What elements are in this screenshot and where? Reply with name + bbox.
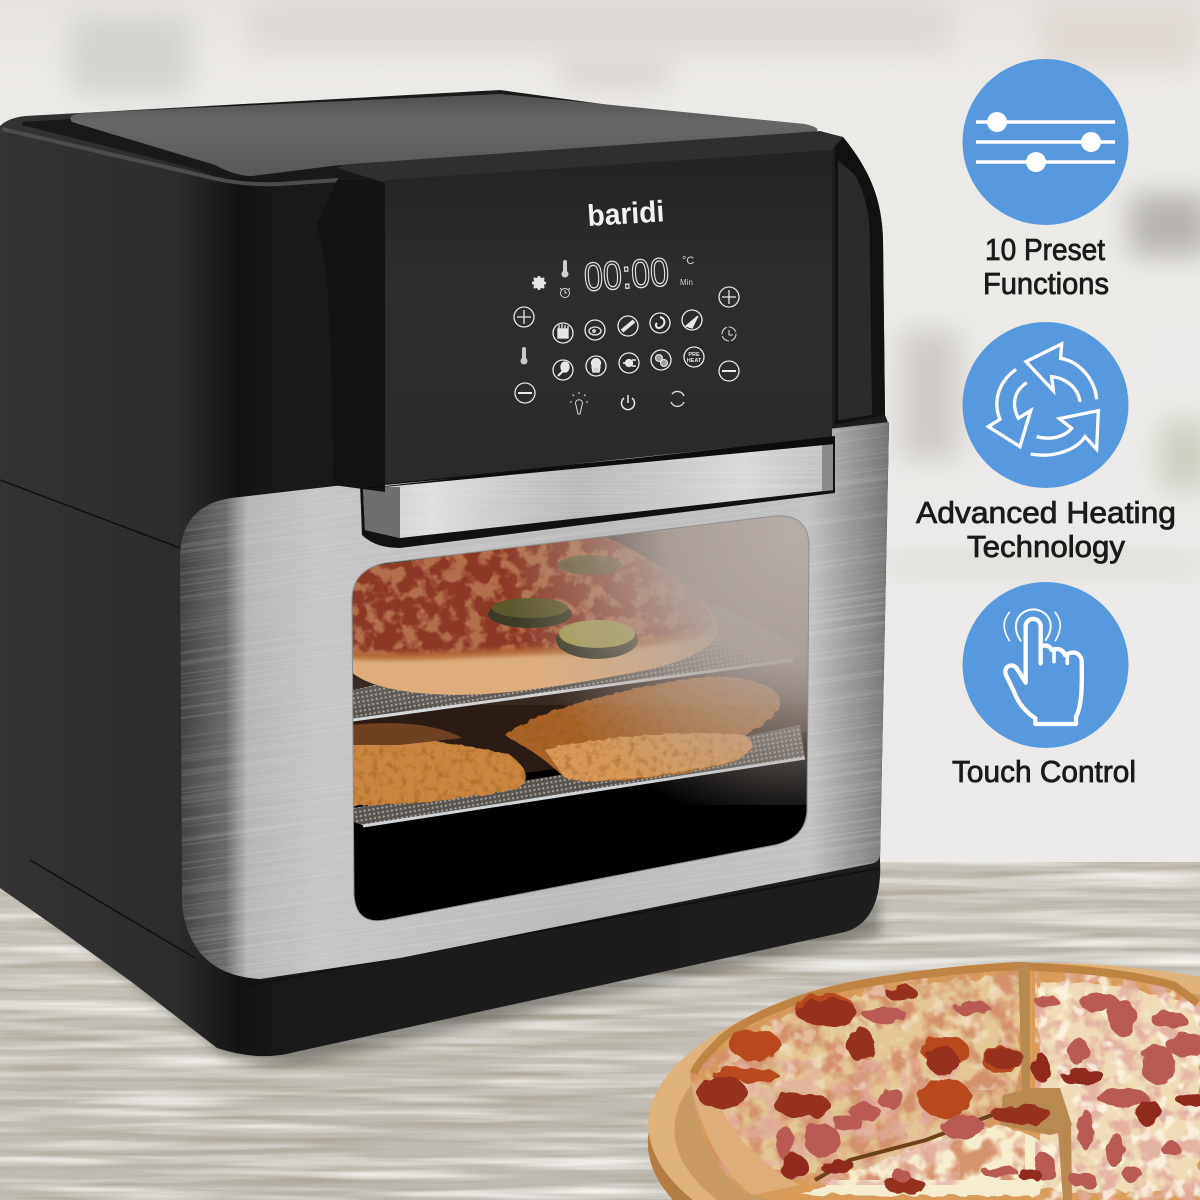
icon: light bulb [570,392,588,414]
top rim highlight [2,129,338,184]
label: Advanced Heating [916,495,1176,530]
button: temperature plus [514,307,534,327]
pizza [680,955,1200,1200]
stainless steel front panel [180,422,889,979]
feature: 10 preset functions [962,59,1128,301]
left breaded chicken [352,735,526,806]
icon: sliders [962,59,1128,225]
control panel [358,150,835,489]
upper rack [353,605,803,720]
degree label: °C [682,255,694,267]
wooden countertop [0,862,1200,1200]
lid tray [70,94,817,176]
brand name: baridi [586,195,665,233]
icon: rotate [671,391,684,406]
upper rack front edge [353,660,793,720]
icon: small thermometer [562,260,568,278]
preset buttons row one [553,310,702,343]
fryer body [0,90,889,1056]
cheese layer [712,975,1200,1195]
lower rack [353,725,805,826]
preheat label: HEAT [687,358,702,364]
feature: advanced heating technology [916,322,1176,564]
door handle [360,440,840,548]
wooden pizza board [648,963,1200,1200]
icon: circulating arrows [962,322,1128,488]
control panel side strip [316,180,385,492]
label: Technology [967,529,1125,564]
sauce patches [711,994,1018,1118]
icon: thermometer [520,347,528,364]
pizza in oven [345,530,725,695]
feature: touch control [952,582,1136,789]
right breaded chicken [505,677,780,781]
button: time minus [719,361,739,381]
icon: timer clock [722,327,736,341]
preheat label [687,352,702,364]
label: 10 Preset [985,232,1105,267]
time display: 00:00 [583,250,670,300]
label [916,495,1176,564]
lower rack front edge [363,758,805,826]
crust rim [690,962,1200,1072]
fryer shadow on counter [60,900,880,1064]
icon: fan [532,276,546,290]
slice gaps [1000,958,1072,1200]
label: Touch Control [952,754,1136,789]
preset buttons row two [553,347,704,380]
button: temperature minus [515,383,535,403]
blurred kitchen background [0,0,1200,880]
body top face [22,92,843,180]
ham and bacon toppings [697,985,1200,1194]
icon: alarm clock [560,288,570,298]
control panel top cap [337,131,843,182]
window fog [512,516,808,805]
fryer right side band [835,137,885,425]
label [983,232,1109,301]
air fryer [0,90,889,1056]
toppings mottling [680,955,1200,1200]
minutes label: Min [680,278,693,287]
label: Functions [983,266,1109,301]
oven window [345,505,815,930]
button: time plus [719,287,739,307]
preheat label: PRE [688,352,700,358]
icon: touch hand [962,582,1128,748]
icon: power [622,395,634,410]
bread edge [692,1085,800,1195]
